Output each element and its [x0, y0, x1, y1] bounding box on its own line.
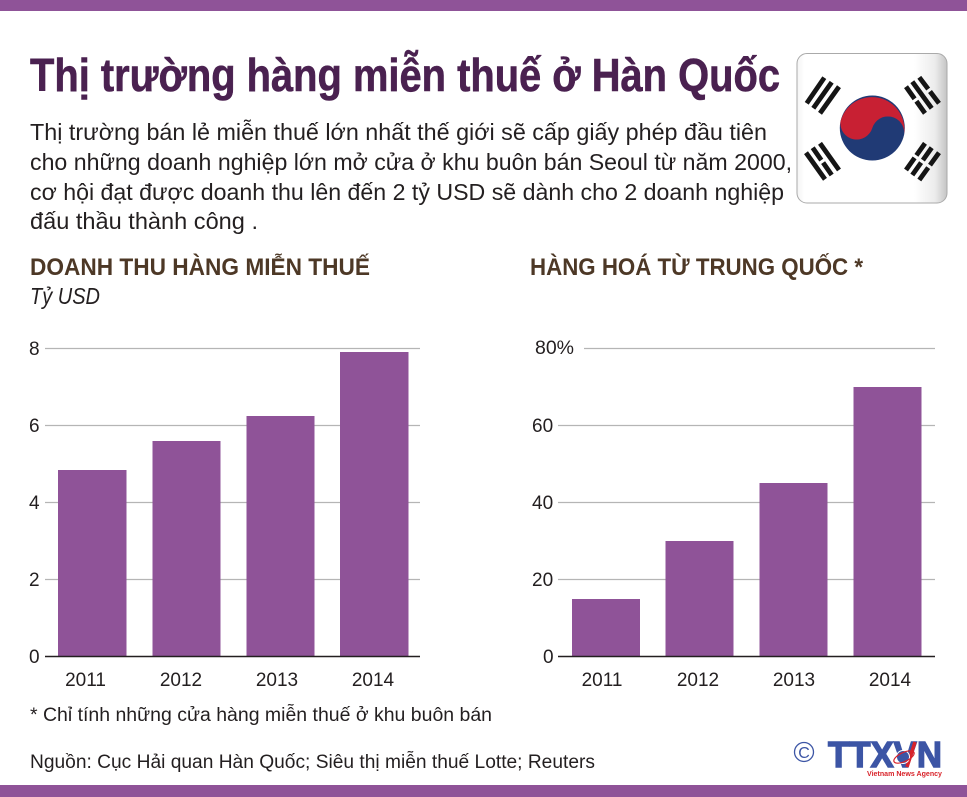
bar chart: goods from China: 2011 — [582, 670, 622, 691]
copyright mark — [794, 742, 814, 762]
bar chart: revenue: 8 — [29, 339, 40, 360]
bar chart: goods from China: 40 — [532, 493, 553, 514]
intro text block: cho những doanh nghiệp lớn mở cửa ở khu buôn bán Seoul từ năm 2000, — [30, 149, 792, 175]
bar chart: goods from China: 60 — [532, 416, 553, 437]
bar chart: goods from China: 20 — [532, 570, 553, 591]
bar chart: goods from China: 2012 — [677, 670, 719, 691]
intro text block: Thị trường bán lẻ miễn thuế lớn nhất thế giới sẽ cấp giấy phép đầu tiên — [30, 119, 767, 145]
bar chart: revenue: 2014 — [352, 670, 395, 691]
source: Nguồn: Cục Hải quan Hàn Quốc; Siêu thị miễn thuế Lotte; Reuters — [30, 751, 595, 773]
globe emblem — [892, 742, 916, 767]
top band — [0, 0, 967, 11]
bottom band — [0, 785, 967, 797]
bar chart: goods from China: 2013 — [773, 670, 815, 691]
heading: goods from China: HÀNG HOÁ TỪ TRUNG QUỐC * — [530, 253, 864, 281]
bar chart: goods from China: 0 — [543, 647, 554, 668]
title: Thị trường hàng miễn thuế ở Hàn Quốc — [30, 49, 780, 101]
unit label: Tỷ USD — [30, 283, 100, 309]
bar chart: revenue: 2011 — [65, 670, 106, 691]
icon: South Korean flag — [797, 54, 947, 203]
bar chart: goods from China — [532, 338, 935, 691]
footnote: * Chỉ tính những cửa hàng miễn thuế ở khu buôn bán — [30, 704, 492, 726]
bar chart: revenue: 2013 — [256, 670, 298, 691]
bar chart: revenue — [29, 339, 420, 691]
bar chart: goods from China: 80% — [535, 338, 574, 359]
bar chart: revenue: 2012 — [160, 670, 202, 691]
intro text block: đấu thầu thành công . — [30, 208, 258, 234]
intro text block — [30, 119, 792, 234]
heading: duty-free revenue: DOANH THU HÀNG MIỄN THUẾ — [30, 252, 370, 281]
bar chart: revenue: 0 — [29, 647, 40, 668]
bar chart: revenue: 4 — [29, 493, 40, 514]
taegeuk symbol — [840, 96, 905, 160]
copyright mark: C — [798, 745, 810, 762]
logo: TTXVN — [794, 734, 943, 778]
bar chart: goods from China: 2014 — [869, 670, 912, 691]
intro text block: cơ hội đạt được doanh thu lên đến 2 tỷ USD sẽ dành cho 2 doanh nghiệp — [30, 179, 784, 205]
bar chart: revenue: 2 — [29, 570, 40, 591]
wordmark: TTXVN — [828, 734, 942, 775]
agency tagline: Vietnam News Agency — [867, 769, 943, 778]
bar chart: revenue: 6 — [29, 416, 40, 437]
trigrams — [806, 77, 939, 180]
